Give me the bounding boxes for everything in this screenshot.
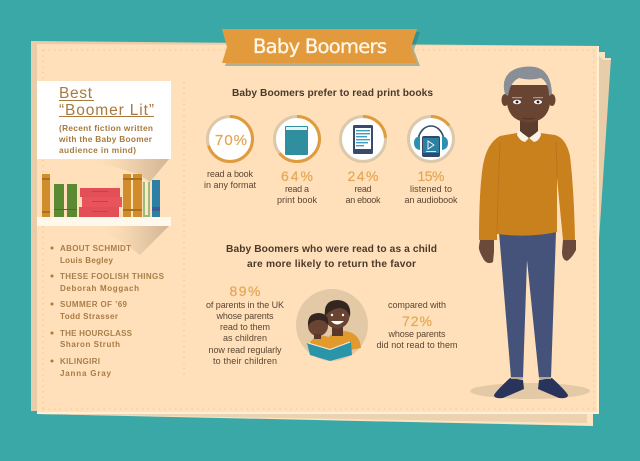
book list: KILINGIRI bbox=[60, 357, 100, 366]
heading: best boomer lit: “Boomer Lit” bbox=[59, 102, 154, 119]
stat: 15 percent audiobook: an audiobook bbox=[404, 195, 458, 205]
heading: best boomer lit: Best bbox=[59, 85, 93, 102]
stat: 72 percent bbox=[376, 300, 458, 350]
heading: read to as a child bbox=[226, 244, 437, 270]
stat: 15 percent audiobook bbox=[404, 116, 458, 205]
stat: 89 percent: now read regularly bbox=[208, 345, 282, 355]
stat: 70 percent: read a book bbox=[207, 169, 254, 179]
stat: 89 percent: to their children bbox=[213, 356, 277, 366]
hands bbox=[479, 240, 576, 263]
shadow bbox=[470, 383, 590, 399]
subtitle: audience in mind) bbox=[59, 145, 136, 155]
stat: 64 percent print book: read a bbox=[285, 184, 309, 194]
eyes bbox=[512, 97, 543, 119]
stat: 89 percent bbox=[206, 283, 284, 366]
books: green bbox=[54, 184, 77, 217]
title: Baby Boomers bbox=[253, 35, 387, 58]
book: pale green bbox=[143, 182, 150, 217]
heading: read to as a child: are more likely to return the favor bbox=[247, 259, 416, 270]
stat: 24 percent ebook: read bbox=[354, 184, 372, 194]
book list: Deborah Moggach bbox=[60, 284, 139, 293]
stat: 15 percent audiobook: 15% bbox=[418, 168, 444, 184]
shoes bbox=[494, 378, 568, 398]
icon: audiobook tablet and headphones bbox=[414, 126, 448, 157]
heading: print books: Baby Boomers prefer to read print books bbox=[232, 88, 433, 99]
socks bbox=[511, 377, 551, 379]
paper stack bbox=[31, 41, 611, 426]
icon: parent reading to child bbox=[296, 289, 368, 361]
sweater bbox=[479, 133, 575, 240]
panel: best boomer lit bbox=[37, 81, 171, 182]
book list bbox=[50, 244, 165, 378]
stat: 70 percent: 70% bbox=[215, 132, 247, 149]
book list: Janna Gray bbox=[60, 369, 112, 378]
books: tall orange bbox=[123, 174, 142, 217]
icon: book bbox=[285, 126, 308, 155]
book list: Sharon Struth bbox=[60, 340, 120, 349]
trousers bbox=[499, 232, 556, 378]
stat: 64 percent print book bbox=[274, 116, 320, 205]
subtitle: (Recent fiction written bbox=[59, 123, 153, 133]
stat: 89 percent: of parents in the UK bbox=[206, 300, 284, 310]
stat: 89 percent: read to them bbox=[220, 322, 270, 332]
stat: 72 percent: 72% bbox=[402, 313, 432, 329]
stat: 89 percent: whose parents bbox=[216, 311, 274, 321]
stat: 24 percent ebook: 24% bbox=[348, 168, 378, 184]
stat: 70 percent bbox=[204, 116, 256, 190]
shelf with books bbox=[37, 174, 171, 255]
book list: ABOUT SCHMIDT bbox=[60, 244, 131, 253]
neck bbox=[520, 118, 538, 139]
stat: 15 percent audiobook: listened to bbox=[410, 184, 452, 194]
heading: best boomer lit bbox=[59, 85, 154, 119]
stat: 72 percent: whose parents bbox=[388, 329, 446, 339]
stat: 64 percent print book: 64% bbox=[281, 168, 313, 184]
book list: SUMMER OF ’69 bbox=[60, 300, 128, 309]
stat: 89 percent: 89% bbox=[230, 283, 260, 299]
stat: 70 percent: in any format bbox=[204, 180, 256, 190]
stat: 72 percent: compared with bbox=[388, 300, 446, 310]
subtitle: with the Baby Boomer bbox=[58, 134, 153, 144]
book list: Todd Strasser bbox=[60, 312, 118, 321]
book list: THESE FOOLISH THINGS bbox=[60, 272, 165, 281]
book list: Louis Begley bbox=[60, 256, 114, 265]
stat: 72 percent: did not read to them bbox=[376, 340, 458, 350]
heading: read to as a child: Baby Boomers who were read to as a child bbox=[226, 244, 437, 255]
book list: THE HOURGLASS bbox=[60, 329, 133, 338]
hair bbox=[504, 67, 552, 96]
icon: ereader bbox=[353, 125, 373, 154]
title banner bbox=[222, 29, 420, 66]
stat: 24 percent ebook: an ebook bbox=[346, 195, 381, 205]
illustration: baby boomer man bbox=[470, 67, 590, 399]
subtitle bbox=[58, 123, 153, 155]
stat: 89 percent: as children bbox=[223, 333, 267, 343]
book: orange bbox=[42, 174, 50, 217]
book: blue bbox=[152, 180, 160, 217]
collar bbox=[517, 130, 541, 142]
stat: 24 percent ebook bbox=[340, 116, 386, 205]
head bbox=[507, 85, 550, 122]
stat: 64 percent print book: print book bbox=[277, 195, 318, 205]
books: red stack bbox=[79, 188, 122, 217]
